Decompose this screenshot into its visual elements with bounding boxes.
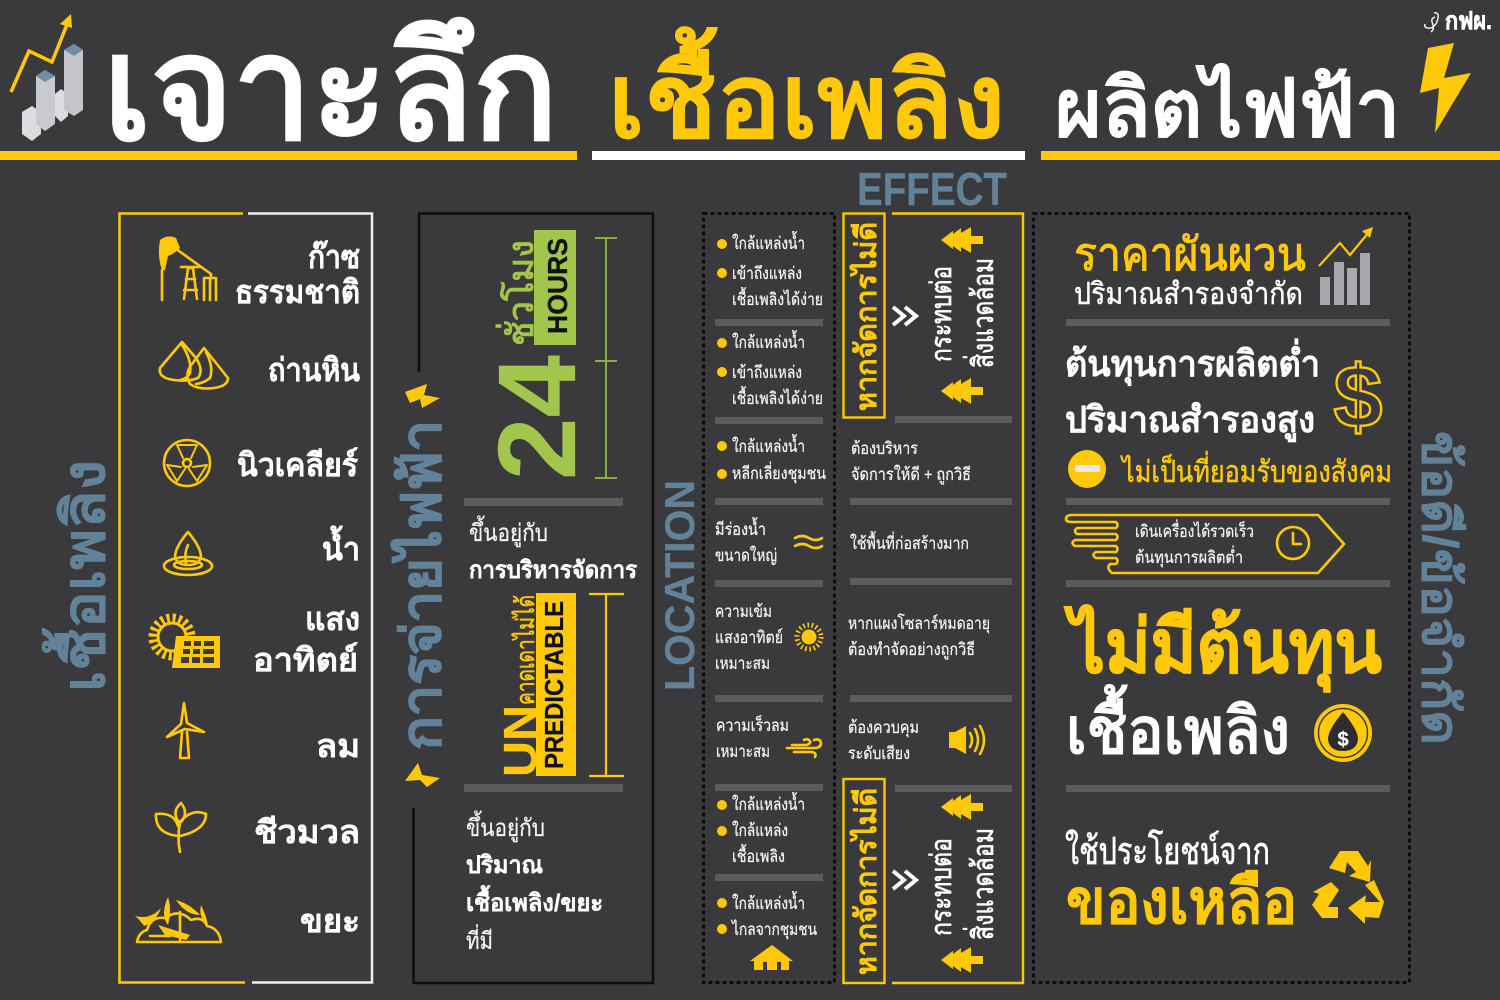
location: nuclear: ใกล้แหล่งน้ำ	[732, 434, 805, 456]
label: น้ำ	[322, 525, 360, 567]
effect: nuclear: จัดการให้ดี + ถูกวิธี	[851, 464, 971, 485]
title word 2: เชื้อเพลิง	[608, 26, 1005, 159]
fast start arrow: ต้นทุนการผลิตต่ำ	[1135, 545, 1243, 568]
fast start arrow: เดินเครื่องได้รวดเร็ว	[1135, 519, 1254, 541]
location: waste: ใกล้แหล่งน้ำ	[732, 891, 805, 913]
logo: EGAT	[1425, 8, 1492, 35]
icon: tree bottom	[941, 947, 983, 973]
text: depends on fuel quantity: ปริมาณ	[466, 852, 543, 879]
location: waste: ไกลจากชุมชน	[730, 919, 817, 940]
icon: gas pump	[159, 236, 216, 300]
label: ก๊าซ	[308, 239, 360, 275]
fast start arrow	[1066, 515, 1344, 573]
waste use block	[1065, 829, 1384, 937]
location: gas: เข้าถึงแหล่ง	[732, 264, 802, 283]
thai label unpredictable: คาดเดาไม่ได้	[511, 595, 540, 705]
text: depends on fuel quantity: ที่มี	[466, 924, 493, 955]
text: depends on fuel quantity: เชื้อเพลิง/ขยะ	[466, 884, 603, 917]
not accepted block	[1068, 450, 1392, 489]
location: coal: เชื้อเพลิงได้ง่าย	[732, 386, 823, 408]
effect: nuclear	[851, 439, 971, 485]
fluctuating price block: ราคาผันผวน	[1074, 228, 1306, 280]
label: ชีวมวล	[254, 814, 360, 850]
thai label hours: ชั่วโมง	[496, 240, 541, 346]
icon: tree top	[941, 227, 983, 253]
location: biomass: ใกล้แหล่งน้ำ	[732, 792, 805, 814]
icon: bolt bottom	[405, 763, 440, 787]
text: impact on: กระทบต่อ	[926, 838, 958, 936]
icon: minus sign	[1068, 450, 1106, 488]
big UN: UN	[494, 705, 546, 777]
icon: tree top	[941, 794, 983, 820]
fluctuating price block: ปริมาณสำรองจำกัด	[1074, 278, 1303, 311]
location: biomass: เชื้อเพลิง	[732, 844, 785, 866]
24 hours block	[476, 230, 617, 480]
fuel: biomass	[156, 803, 360, 852]
icon: tree bottom	[941, 378, 983, 404]
icon: rising bar chart	[11, 14, 83, 141]
icon: chevrons	[893, 307, 916, 325]
label: อาทิตย์	[253, 642, 358, 678]
not accepted block: ไม่เป็นที่ยอมรับของสังคม	[1120, 451, 1392, 489]
text: impact on: กระทบต่อ	[926, 266, 958, 362]
title word 3: ผลิตไฟฟ้า	[1055, 62, 1400, 153]
panel: fuel types	[120, 214, 372, 982]
dashed frame	[704, 214, 834, 982]
title banner	[0, 7, 1500, 170]
logo: EGAT: กฟผ.	[1445, 8, 1492, 35]
location: wind	[716, 714, 821, 761]
fluctuating price block	[1074, 227, 1373, 311]
text: depends on management: การบริหารจัดการ	[469, 557, 637, 584]
location: hydro: มีร่องน้ำ	[715, 517, 766, 539]
text: environment: สิ่งแวดล้อม	[963, 828, 1000, 940]
hours tag	[534, 230, 576, 345]
warning block bottom	[844, 779, 1000, 983]
icon: nuclear	[164, 440, 210, 486]
heading: effect: EFFECT	[857, 163, 1007, 215]
label: ขยะ	[300, 903, 360, 939]
effect: wind	[848, 718, 984, 763]
effect: solar	[848, 613, 990, 660]
fuel: hydro	[164, 525, 360, 575]
hours tag: HOURS	[542, 238, 573, 334]
no fuel cost block	[1063, 603, 1382, 767]
icon: wind turbine	[167, 703, 204, 758]
text: depends on management: ขึ้นอยู่กับ	[469, 515, 548, 548]
location: nuclear: หลีกเลี่ยงชุมชน	[732, 461, 826, 484]
side heading: fuel: เชื้อเพลิง	[42, 460, 117, 692]
icon: solar panel	[153, 618, 220, 668]
low cost block: ปริมาณสำรองสูง	[1065, 399, 1315, 443]
icon: lightning bolt	[1420, 43, 1471, 133]
label: ธรรมชาติ	[235, 274, 360, 310]
big number 24: 24	[476, 355, 599, 480]
title word 1: เจาะลึก	[103, 7, 558, 170]
panel frame	[414, 214, 653, 983]
label: ลม	[316, 728, 360, 764]
fuel: coal	[160, 342, 360, 388]
location: gas: เชื้อเพลิงได้ง่าย	[732, 287, 823, 309]
location: waste	[717, 891, 817, 970]
effect: solar: หากแผงโซลาร์หมดอายุ	[848, 613, 990, 634]
unpredictable block	[494, 593, 624, 777]
bracket	[589, 594, 624, 776]
no fuel cost block: เชื้อเพลิง	[1066, 685, 1290, 767]
panel: power delivery	[414, 214, 653, 983]
label: ถ่านหิน	[268, 352, 360, 388]
location: solar: เหมาะสม	[715, 654, 770, 673]
icon: recycle	[1312, 851, 1384, 924]
fuel: solar	[153, 601, 360, 678]
icon: coal	[160, 342, 228, 388]
fuel: natural gas	[159, 236, 360, 310]
tag: if mismanaged: หากจัดการไม่ดี	[849, 788, 883, 975]
bracket	[595, 238, 617, 478]
icon: clock	[1277, 527, 1309, 559]
tag: if mismanaged: หากจัดการไม่ดี	[849, 222, 883, 411]
effect: nuclear: ต้องบริหาร	[851, 439, 918, 458]
label: แสง	[305, 601, 360, 637]
label: นิวเคลียร์	[237, 447, 358, 483]
effect: solar: ต้องทำจัดอย่างถูกวิธี	[848, 640, 975, 660]
icon: fuel coin: $	[1337, 729, 1349, 751]
location: coal	[717, 330, 823, 408]
location: solar: ความเข้ม	[715, 602, 772, 621]
fuel: nuclear	[164, 440, 358, 486]
predictable tag: PREDICTABLE	[539, 601, 569, 769]
location: gas	[717, 231, 823, 309]
location: biomass: ใกล้แหล่ง	[732, 820, 788, 840]
location: coal: เข้าถึงแหล่ง	[732, 363, 802, 382]
icon: waves	[795, 536, 822, 548]
text: depends on management	[469, 515, 637, 584]
low cost block: ต้นทุนการผลิตต่ำ	[1065, 338, 1320, 387]
panel frame	[120, 214, 372, 982]
location: hydro	[715, 517, 822, 565]
text: depends on fuel quantity: ขึ้นอยู่กับ	[466, 810, 545, 843]
icon: waste pile	[135, 897, 221, 942]
location: hydro: ขนาดใหญ่	[715, 545, 777, 565]
location: wind: ความเร็วลม	[716, 714, 789, 735]
fuel: wind	[167, 703, 360, 764]
icon: chevrons	[893, 871, 916, 889]
icon: speaker	[949, 726, 984, 754]
panel frame	[892, 214, 1023, 983]
location: solar: แสงอาทิตย์	[715, 628, 783, 647]
effect: hydro: ใช้พื้นที่ก่อสร้างมาก	[850, 531, 969, 553]
side heading: power delivery	[390, 384, 452, 787]
fuel: waste	[135, 897, 360, 942]
dashed frame	[1034, 214, 1410, 982]
icon: bolt top	[405, 384, 440, 408]
location: solar	[715, 602, 821, 673]
icon: fuel coin	[1314, 704, 1372, 762]
low cost block	[1065, 338, 1382, 446]
warning block top	[844, 214, 1000, 418]
icon: wind gust	[787, 739, 821, 757]
icon: water drop	[164, 532, 212, 575]
icon: price chart	[1319, 227, 1373, 305]
location: coal: ใกล้แหล่งน้ำ	[732, 330, 805, 352]
no fuel cost block: ไม่มีต้นทุน	[1063, 603, 1382, 693]
waste use block: ใช้ประโยชน์จาก	[1065, 829, 1270, 873]
text: environment: สิ่งแวดล้อม	[963, 258, 1000, 368]
waste use block: ของเหลือ	[1066, 868, 1297, 937]
icon: houses	[750, 945, 793, 970]
location: biomass	[717, 792, 805, 866]
location: wind: เหมาะสม	[716, 742, 770, 761]
panel: effect	[844, 214, 1023, 983]
side heading: pros and cons: ข้อดี/ข้อจำกัด	[1412, 431, 1468, 745]
effect: wind: ระดับเสียง	[848, 744, 910, 763]
icon: dollar: $	[1334, 347, 1382, 446]
title underlines	[0, 151, 1500, 160]
icon: sun	[797, 625, 821, 649]
heading: location: LOCATION	[656, 480, 703, 691]
text: depends on fuel quantity	[466, 810, 603, 955]
location: nuclear	[717, 434, 826, 484]
location: gas: ใกล้แหล่งน้ำ	[732, 231, 805, 253]
panel: location	[704, 214, 834, 982]
panel: pros and cons	[1034, 214, 1410, 982]
effect: wind: ต้องควบคุม	[848, 718, 919, 738]
heading: การจ่ายไฟฟ้า	[390, 420, 452, 750]
icon: leaf sprout	[156, 803, 206, 852]
